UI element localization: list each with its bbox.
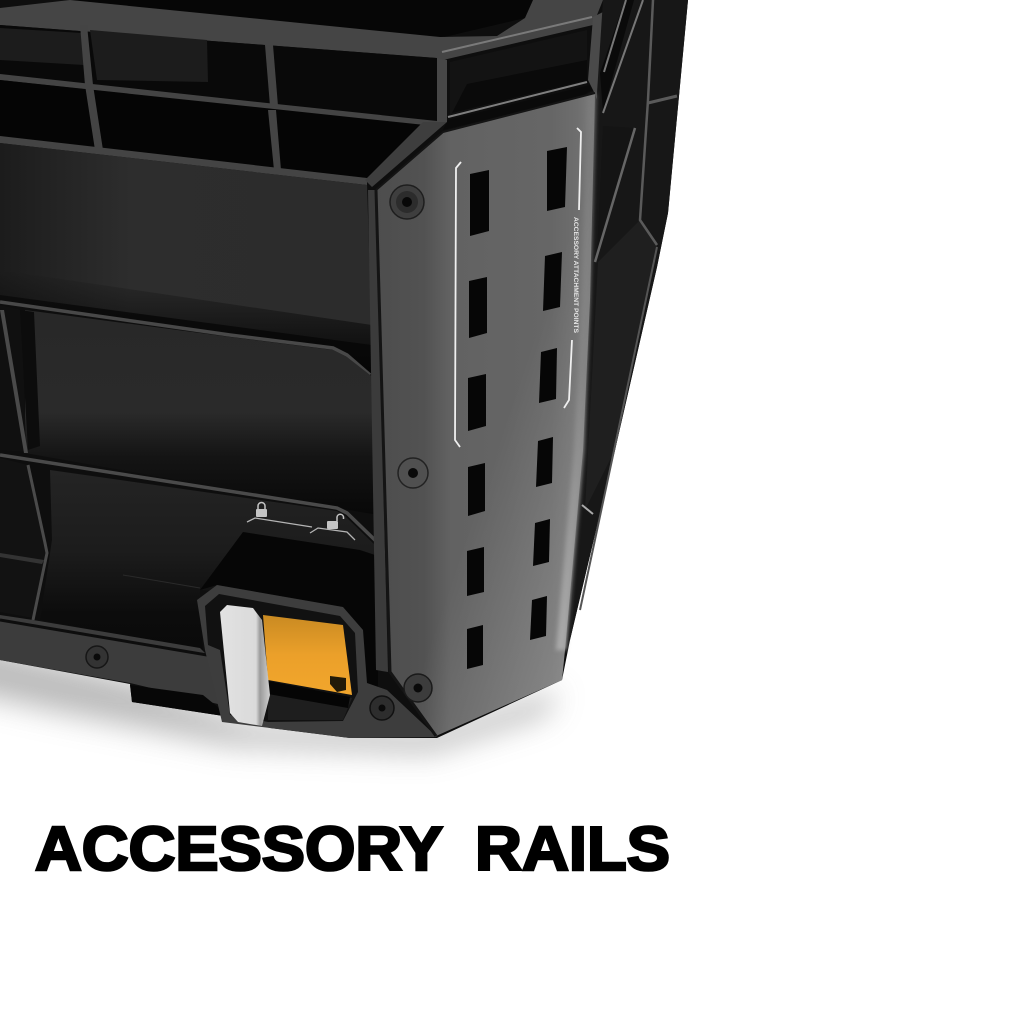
storage crate body [0,0,688,738]
metal latch handle [220,605,270,726]
crate interior top [70,0,533,38]
right side ribs [570,0,688,640]
latch lock indicators [247,503,355,540]
attachment point bracket right [577,128,581,210]
right column of slots [530,147,567,640]
crate top rim [0,0,603,60]
ground shadow [0,640,560,752]
icon: locked padlock [256,503,267,517]
left column of slots [467,170,489,669]
title: RAILS [475,815,670,884]
icon: unlocked padlock [327,514,344,529]
small fastener on lip [86,646,108,668]
middle interior panel [25,310,378,515]
title [35,815,670,884]
lower grid row [0,80,447,187]
lower interior panel [40,470,378,650]
icon: brand logo [330,676,346,692]
screw middle [398,458,428,488]
screw bottom [404,674,432,702]
screw top [390,185,424,219]
upper grid row [0,25,437,127]
rail label: ACCESSORY ATTACHMENT POINTS [572,217,579,334]
title: ACCESSORY [35,815,443,884]
latch housing [197,532,437,738]
side wall strip [368,190,388,672]
attachment point bracket left [455,162,461,447]
accessory rail plate [368,93,596,736]
front right compartment [437,12,603,130]
upper interior panel [0,143,372,345]
shelf shadow [0,270,372,375]
orange latch slider [263,615,352,695]
small fastener near latch [370,696,394,720]
front bottom lip [0,615,222,705]
latch foot [130,685,230,717]
